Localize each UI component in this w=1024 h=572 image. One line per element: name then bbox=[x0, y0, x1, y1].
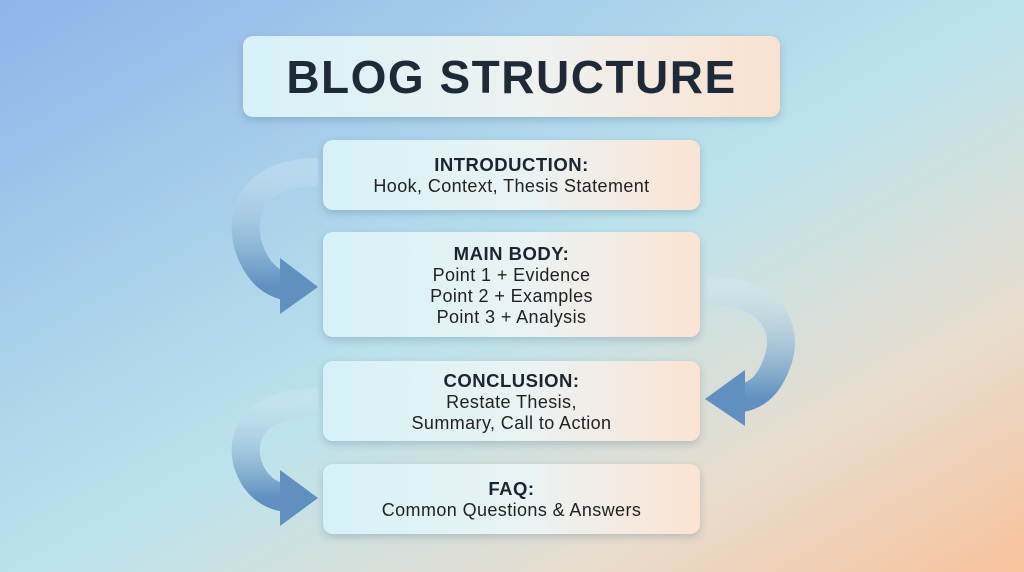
arrow: conclusion to faq bbox=[246, 402, 318, 526]
panel: faq: Common Questions & Answers bbox=[382, 500, 641, 520]
panel: introduction: Hook, Context, Thesis Statement bbox=[373, 176, 650, 196]
panel: conclusion: CONCLUSION: bbox=[443, 370, 580, 390]
panel: introduction bbox=[323, 140, 700, 210]
panel: introduction: INTRODUCTION: bbox=[434, 154, 589, 175]
panel: conclusion: Restate Thesis, bbox=[446, 392, 577, 412]
panel: main body: MAIN BODY: bbox=[454, 242, 569, 264]
panel: faq bbox=[323, 464, 700, 534]
arrow: main body to conclusion bbox=[705, 290, 781, 426]
panel: main body bbox=[323, 232, 700, 337]
title bbox=[243, 36, 780, 117]
title: BLOG STRUCTURE bbox=[286, 50, 737, 102]
panel: faq: FAQ: bbox=[488, 478, 535, 499]
panel: conclusion: Summary, Call to Action bbox=[412, 412, 611, 432]
panel: main body: Point 1 + Evidence bbox=[433, 264, 590, 284]
panel: main body: Point 3 + Analysis bbox=[437, 306, 586, 326]
panel: main body: Point 2 + Examples bbox=[430, 286, 593, 306]
panel: conclusion bbox=[323, 361, 700, 441]
arrow: intro to main body bbox=[246, 172, 318, 314]
